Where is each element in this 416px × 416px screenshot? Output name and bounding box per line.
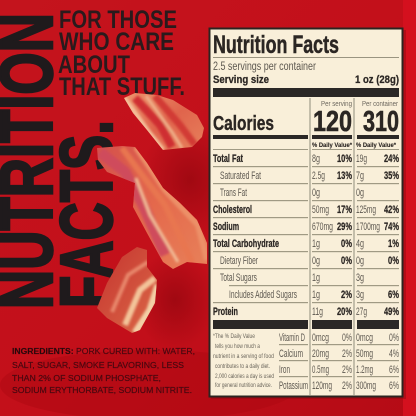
ingredients <box>12 346 195 395</box>
nutrient rows: 35% <box>384 170 399 182</box>
column headers: Per serving <box>321 99 352 108</box>
nutrient rows: 29% <box>337 221 352 233</box>
nutrient rows: 11g <box>312 306 323 318</box>
panel title: Nutrition Facts <box>213 31 339 59</box>
nutrient rows: Total Fat <box>213 153 243 165</box>
ingredients: INGREDIENTS: PORK CURED WITH: WATER, <box>12 346 195 356</box>
nutrient rows: 670mg <box>312 221 333 233</box>
nutrient rows: Sodium <box>213 221 239 233</box>
vitamins and minerals: 0% <box>389 332 399 344</box>
nutrient rows: 3g <box>356 272 364 284</box>
nutrient rows: 125mg <box>356 204 376 216</box>
serving size: Serving size <box>213 74 269 86</box>
calories: 120 <box>313 106 352 138</box>
heading: vertical FACTS.: FACTS. <box>45 120 128 308</box>
nutrient rows: 0% <box>388 255 399 267</box>
calories: 310 <box>363 106 399 138</box>
vitamins and minerals: 0% <box>342 332 352 344</box>
nutrient rows: 3g <box>356 289 364 301</box>
serving size: 1 oz (28g) <box>355 74 399 86</box>
nutrient rows: 6% <box>388 289 399 301</box>
tagline: THAT STUFF. <box>59 73 185 101</box>
column headers: Per container <box>362 99 398 108</box>
footnote: 2,000 calories a day is used <box>215 373 274 380</box>
calories <box>213 106 399 138</box>
daily value headers: % Daily Value* <box>356 143 397 149</box>
nutrient rows: 24% <box>384 153 399 165</box>
bacon strip: top <box>124 93 204 150</box>
nutrient rows: 0% <box>341 238 352 250</box>
tagline <box>58 6 185 101</box>
vitamins and minerals: Calcium <box>279 348 303 360</box>
daily value headers <box>312 143 397 149</box>
nutrient rows: 17% <box>337 204 352 216</box>
bacon strip: middle <box>95 144 210 272</box>
vitamins and minerals: 6% <box>389 364 399 376</box>
nutrient rows: 42% <box>384 204 399 216</box>
nutrient rows: 0g <box>312 255 320 267</box>
ingredients: SODIUM ERYTHORBATE, SODIUM NITRITE. <box>12 385 192 395</box>
nutrient rows: Total Sugars <box>220 272 257 284</box>
vitamins and minerals: Vitamin D <box>279 332 305 344</box>
footnote <box>213 333 274 389</box>
footnote: for general nutrition advice. <box>215 382 272 389</box>
ingredients: THAN 2% OF SODIUM PHOSPHATE, <box>12 373 161 383</box>
vitamins and minerals: 2% <box>342 364 352 376</box>
nutrient rows: 1g <box>312 238 320 250</box>
nutrient rows <box>213 153 399 318</box>
tagline: ABOUT <box>58 51 130 79</box>
vitamins and minerals: 2% <box>342 348 352 360</box>
serving size <box>213 74 399 86</box>
footnote: nutrient in a serving of food <box>213 353 274 360</box>
nutrient rows: 0g <box>356 255 364 267</box>
nutrient rows: 13% <box>337 170 352 182</box>
nutrient rows: 19g <box>356 153 367 165</box>
nutrient rows: 1% <box>388 238 399 250</box>
vitamins and minerals: 1.2mg <box>356 364 373 376</box>
vitamins and minerals: 0mcg <box>312 332 329 344</box>
nutrient rows: 50mg <box>312 204 329 216</box>
footnote: tells you how much a <box>215 343 260 350</box>
tagline: WHO CARE <box>59 28 174 56</box>
vitamins and minerals: Potassium <box>279 380 308 392</box>
nutrient rows: 0% <box>341 255 352 267</box>
vitamins and minerals: 4% <box>389 348 399 360</box>
panel: nutrition facts <box>210 28 406 399</box>
nutrient rows: Total Carbohydrate <box>213 238 279 250</box>
vitamins and minerals: 300mg <box>356 380 376 392</box>
nutrient rows: Cholesterol <box>213 204 252 216</box>
nutrient rows: Includes Added Sugars <box>229 289 297 301</box>
nutrient rows: 49% <box>384 306 399 318</box>
servings: 2.5 servings per container <box>213 61 316 73</box>
vitamins and minerals: 20mg <box>312 348 329 360</box>
nutrient rows: 0g <box>312 187 320 199</box>
tagline: FOR THOSE <box>59 6 177 34</box>
vitamins and minerals: 120mg <box>312 380 332 392</box>
footnote: *The % Daily Value <box>213 333 255 340</box>
nutrient rows: 27g <box>356 306 367 318</box>
bacon strip: bottom <box>97 247 157 333</box>
nutrient rows: 10% <box>337 153 352 165</box>
nutrient rows: 1700mg <box>356 221 380 233</box>
ingredients: SALT, SUGAR, SMOKE FLAVORING, LESS <box>12 360 184 370</box>
nutrient rows: 2% <box>341 289 352 301</box>
nutrient rows: Dietary Fiber <box>220 255 258 267</box>
nutrient rows: 74% <box>384 221 399 233</box>
nutrient rows: 20% <box>337 306 352 318</box>
footnote: contributes to a daily diet. <box>215 363 270 370</box>
calories: Calories <box>213 113 274 135</box>
vitamins and minerals: 0.5mg <box>312 364 329 376</box>
daily value headers: % Daily Value* <box>312 143 353 149</box>
vitamins and minerals: 50mg <box>356 348 373 360</box>
nutrient rows: 4g <box>356 238 364 250</box>
column headers <box>321 99 398 108</box>
nutrient rows: 1g <box>312 289 320 301</box>
nutrient rows: 1g <box>312 272 320 284</box>
nutrient rows: 8g <box>312 153 320 165</box>
vitamins and minerals: Iron <box>279 364 290 376</box>
vitamins and minerals: 2% <box>342 380 352 392</box>
vitamins and minerals <box>279 332 399 392</box>
nutrient rows: Trans Fat <box>220 187 247 199</box>
vitamins and minerals: 6% <box>389 380 399 392</box>
nutrient rows: 2.5g <box>312 170 325 182</box>
vitamins and minerals: 0mcg <box>356 332 373 344</box>
nutrient rows: Protein <box>213 306 238 318</box>
nutrient rows: Saturated Fat <box>220 170 261 182</box>
nutrient rows: 7g <box>356 170 364 182</box>
nutrient rows: 0g <box>356 187 364 199</box>
